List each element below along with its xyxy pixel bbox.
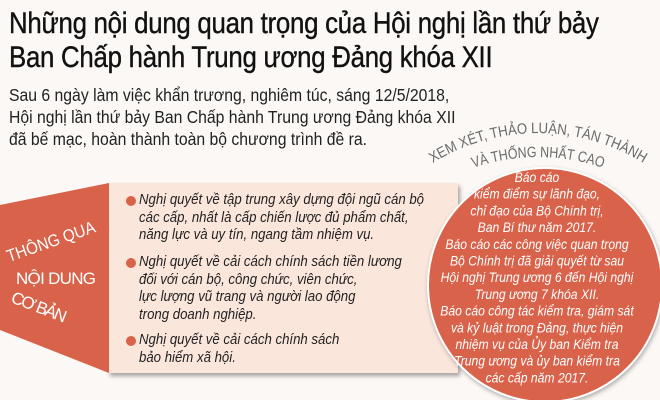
panel: left arrow label: THÔNG QUA — [4, 217, 98, 266]
bullet 1: năng lực và uy tín, ngang tầm nhiệm vụ. — [139, 226, 374, 243]
bullet 3 — [126, 331, 339, 366]
bullet 1: các cấp, nhất là cấp chiến lược đủ phẩm chất, — [139, 208, 408, 226]
title: Ban Chấp hành Trung ương Đảng khóa XII — [9, 41, 492, 74]
circle: nhiệm vụ của Ủy ban Kiểm tra — [455, 336, 619, 352]
intro text: Sau 6 ngày làm việc khẩn trương, nghiêm túc, sáng 12/5/2018, — [9, 85, 449, 105]
title — [9, 7, 600, 74]
bullet 3: bảo hiểm xã hội. — [139, 348, 236, 366]
bullet 2: đối với cán bộ, công chức, viên chức, — [139, 270, 357, 288]
circle: chỉ đạo của Bộ Chính trị, — [470, 203, 604, 219]
panel: resolutions box — [108, 183, 458, 373]
intro text: đã bế mạc, hoàn thành toàn bộ chương trình đề ra. — [9, 129, 367, 149]
arc heading: XEM XÉT, THẢO LUẬN, TÁN THÀNH — [428, 120, 648, 163]
circle: Hội nghị Trung ương 6 đến Hội nghị — [441, 269, 634, 285]
circle: Báo cáo — [515, 169, 559, 185]
bullet 1 — [126, 191, 424, 243]
circle: kiểm điểm sự lãnh đạo, — [474, 186, 600, 202]
intro text — [9, 85, 455, 149]
arc heading: VÀ THỐNG NHẤT CAO — [470, 144, 604, 167]
bullet 2: lực lượng vũ trang và người lao động — [139, 288, 355, 305]
title: Những nội dung quan trọng của Hội nghị lần thứ bảy — [9, 7, 599, 40]
bullet 2: Nghị quyết về cải cách chính sách tiền lương — [139, 253, 402, 270]
bullet 1: Nghị quyết về tập trung xây dựng đội ngũ cán bộ — [139, 191, 424, 208]
intro text: Hội nghị lần thứ bảy Ban Chấp hành Trung ương Đảng khóa XII — [9, 107, 455, 127]
bullet 3: Nghị quyết về cải cách chính sách — [139, 331, 339, 348]
circle — [428, 168, 660, 400]
bullet 2: trong doanh nghiệp. — [139, 306, 256, 322]
circle: Báo cáo công tác kiểm tra, giám sát — [440, 303, 635, 319]
circle: Báo cáo các công việc quan trọng — [445, 236, 629, 252]
bullet 2 — [126, 253, 402, 322]
circle: và kỷ luật trong Đảng, thực hiện — [451, 319, 623, 336]
circle: Trung ương 7 khóa XII. — [475, 286, 599, 302]
circle: Bộ Chính trị đã giải quyết từ sau — [450, 253, 625, 269]
circle: Trung ương và ủy ban kiểm tra — [454, 353, 620, 369]
circle: các cấp năm 2017. — [486, 370, 588, 386]
circle: Ban Bí thư năm 2017. — [478, 219, 596, 235]
panel: left arrow label: NỘI DUNG — [16, 269, 96, 288]
panel: left arrow label: CƠ BẢN — [9, 288, 70, 327]
